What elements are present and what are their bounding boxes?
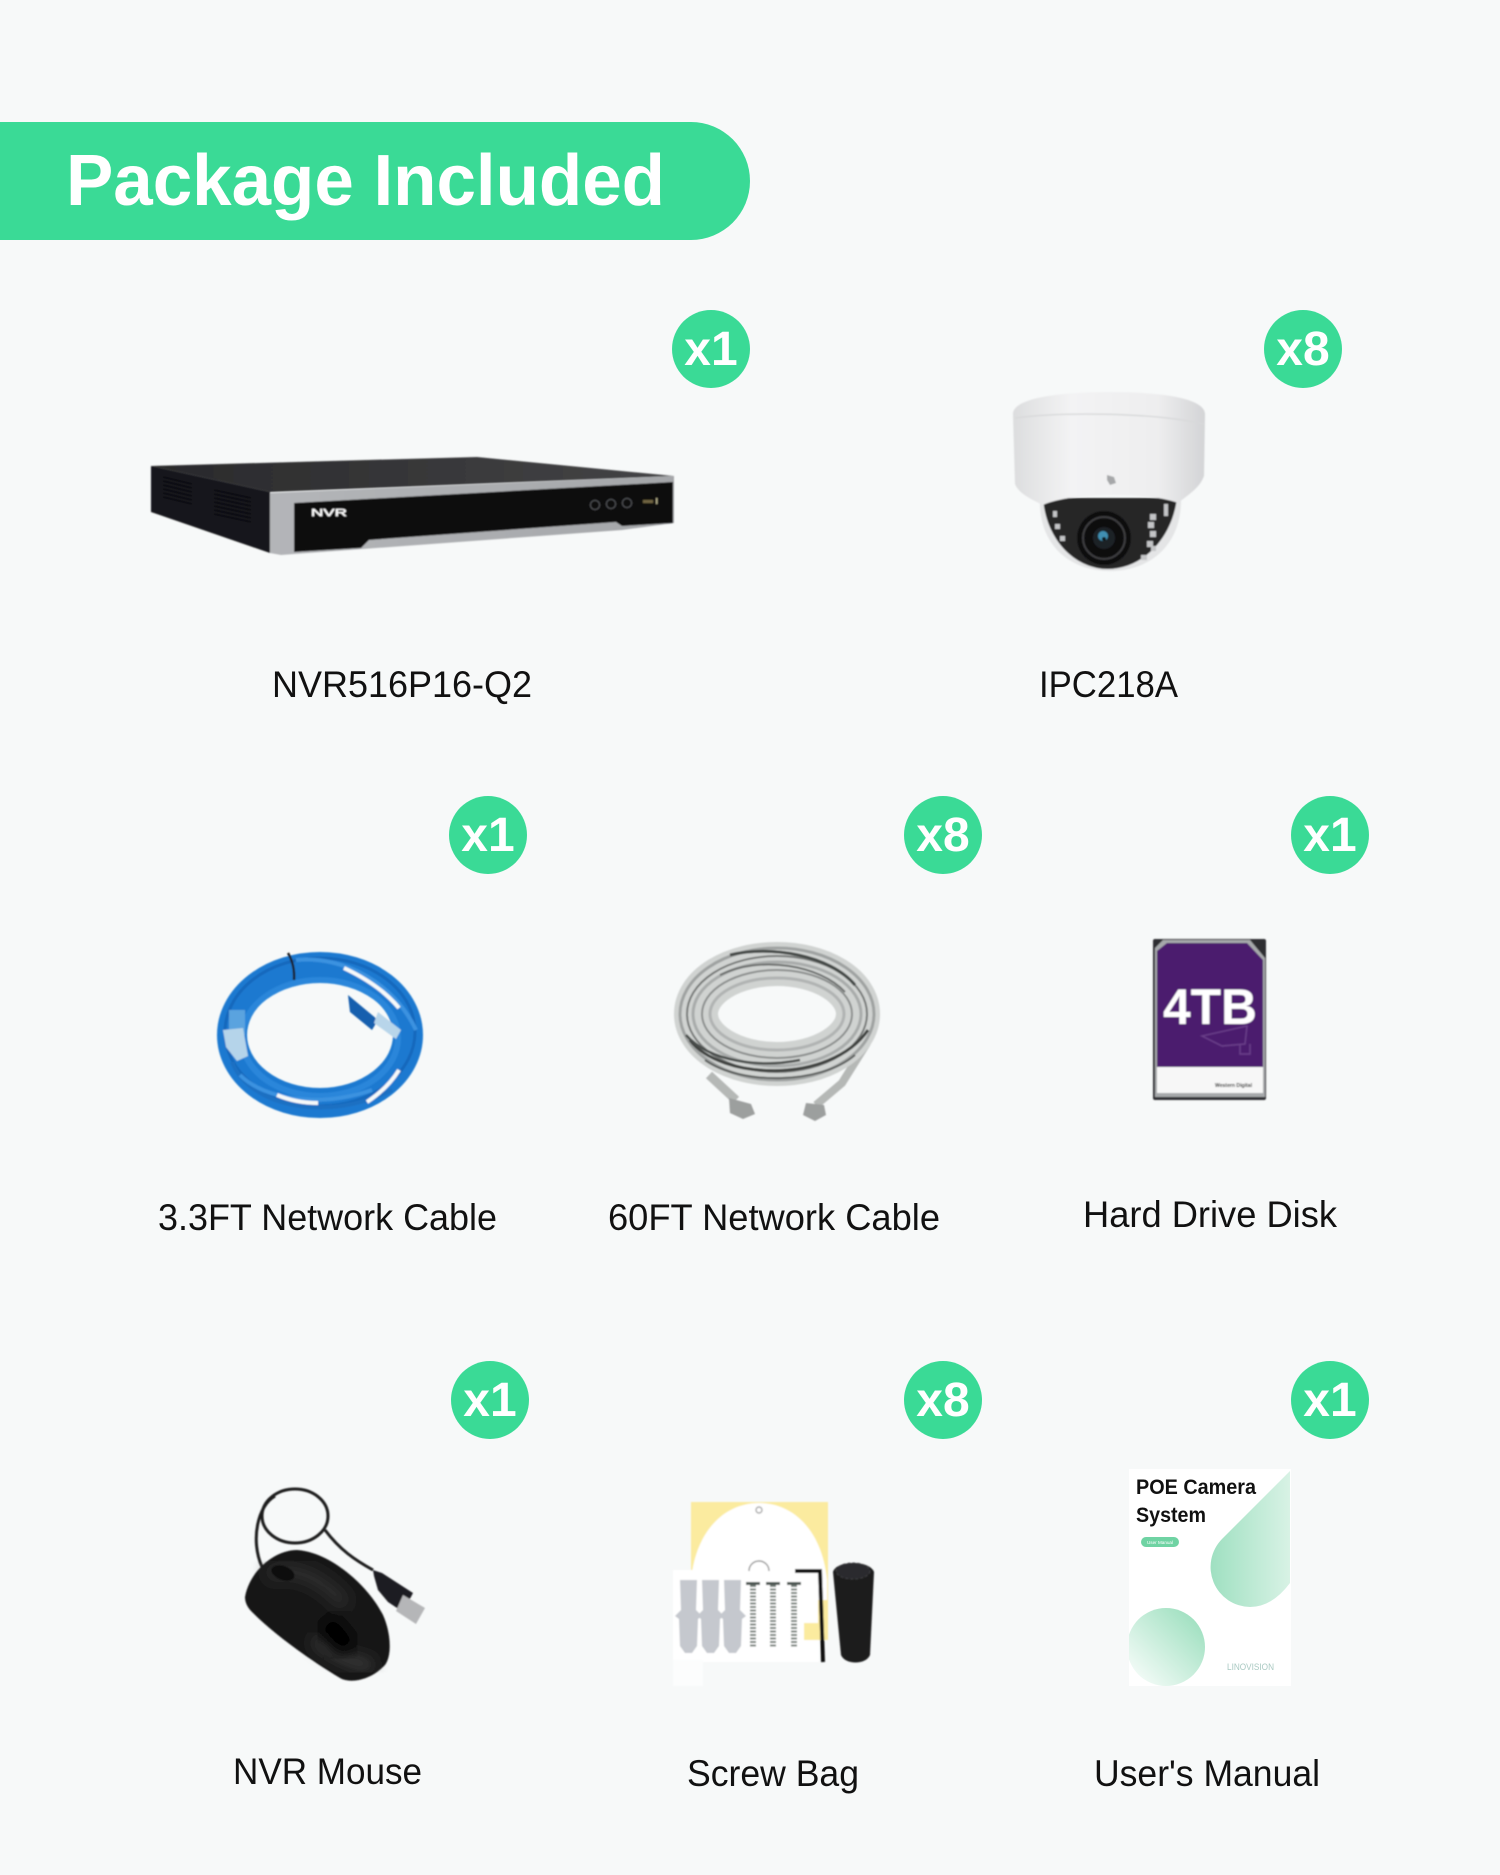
icon: manual cover: POE Camera	[1136, 1476, 1256, 1499]
panel: NVR recorder	[151, 310, 750, 705]
icon: NVR device: NVR	[311, 507, 348, 519]
panel: mouse	[233, 1361, 529, 1792]
quantity badge x8: x8	[1276, 323, 1330, 376]
quantity badge x1: x1	[684, 323, 738, 376]
quantity badge x1	[1291, 1361, 1369, 1439]
quantity badge x8: x8	[916, 809, 970, 862]
label: user manual: User's Manual	[1094, 1753, 1320, 1794]
quantity badge x8	[904, 1361, 982, 1439]
icon: manual cover	[1127, 1469, 1291, 1686]
icon: NVR device	[151, 457, 674, 555]
icon: USB mouse	[245, 1489, 425, 1681]
icon: dome camera	[1013, 392, 1205, 571]
quantity badge x1: x1	[461, 809, 515, 862]
quantity badge x1	[1291, 796, 1369, 874]
quantity badge x1	[451, 1361, 529, 1439]
label: NVR model: NVR516P16-Q2	[272, 664, 532, 705]
label: long cable: 60FT Network Cable	[608, 1197, 940, 1238]
quantity badge x1	[672, 310, 750, 388]
quantity badge x8: x8	[916, 1374, 970, 1427]
label: screw bag: Screw Bag	[687, 1753, 859, 1794]
icon: manual cover: System	[1136, 1504, 1206, 1527]
panel: dome camera	[1013, 310, 1342, 705]
panel: hard drive	[1083, 796, 1369, 1235]
panel: short network cable	[158, 796, 527, 1238]
quantity badge x1: x1	[463, 1374, 517, 1427]
quantity badge x1: x1	[1303, 809, 1357, 862]
icon: grey cable	[680, 948, 874, 1121]
icon: manual cover: User Manual	[1147, 1540, 1173, 1545]
icon: manual cover: LINOVISION	[1227, 1662, 1274, 1673]
panel: user manual	[1094, 1361, 1369, 1794]
quantity badge x8	[1264, 310, 1342, 388]
panel: long network cable	[608, 796, 982, 1238]
icon: 4TB hard drive: 4TB	[1163, 979, 1257, 1035]
icon: 4TB hard drive: Western Digital	[1215, 1083, 1252, 1089]
panel: screw bag	[673, 1361, 982, 1794]
icon: blue cable	[223, 953, 416, 1107]
title banner: Package Included	[66, 141, 665, 221]
label: hard drive: Hard Drive Disk	[1083, 1194, 1337, 1235]
label: mouse: NVR Mouse	[233, 1751, 422, 1792]
title banner	[0, 122, 750, 240]
icon: 4TB hard drive	[1153, 939, 1266, 1100]
quantity badge x1	[449, 796, 527, 874]
label: short cable: 3.3FT Network Cable	[158, 1197, 497, 1238]
quantity badge x8	[904, 796, 982, 874]
quantity badge x1: x1	[1303, 1374, 1357, 1427]
icon: screw bag accessories	[673, 1502, 874, 1686]
label: camera model: IPC218A	[1039, 664, 1178, 705]
